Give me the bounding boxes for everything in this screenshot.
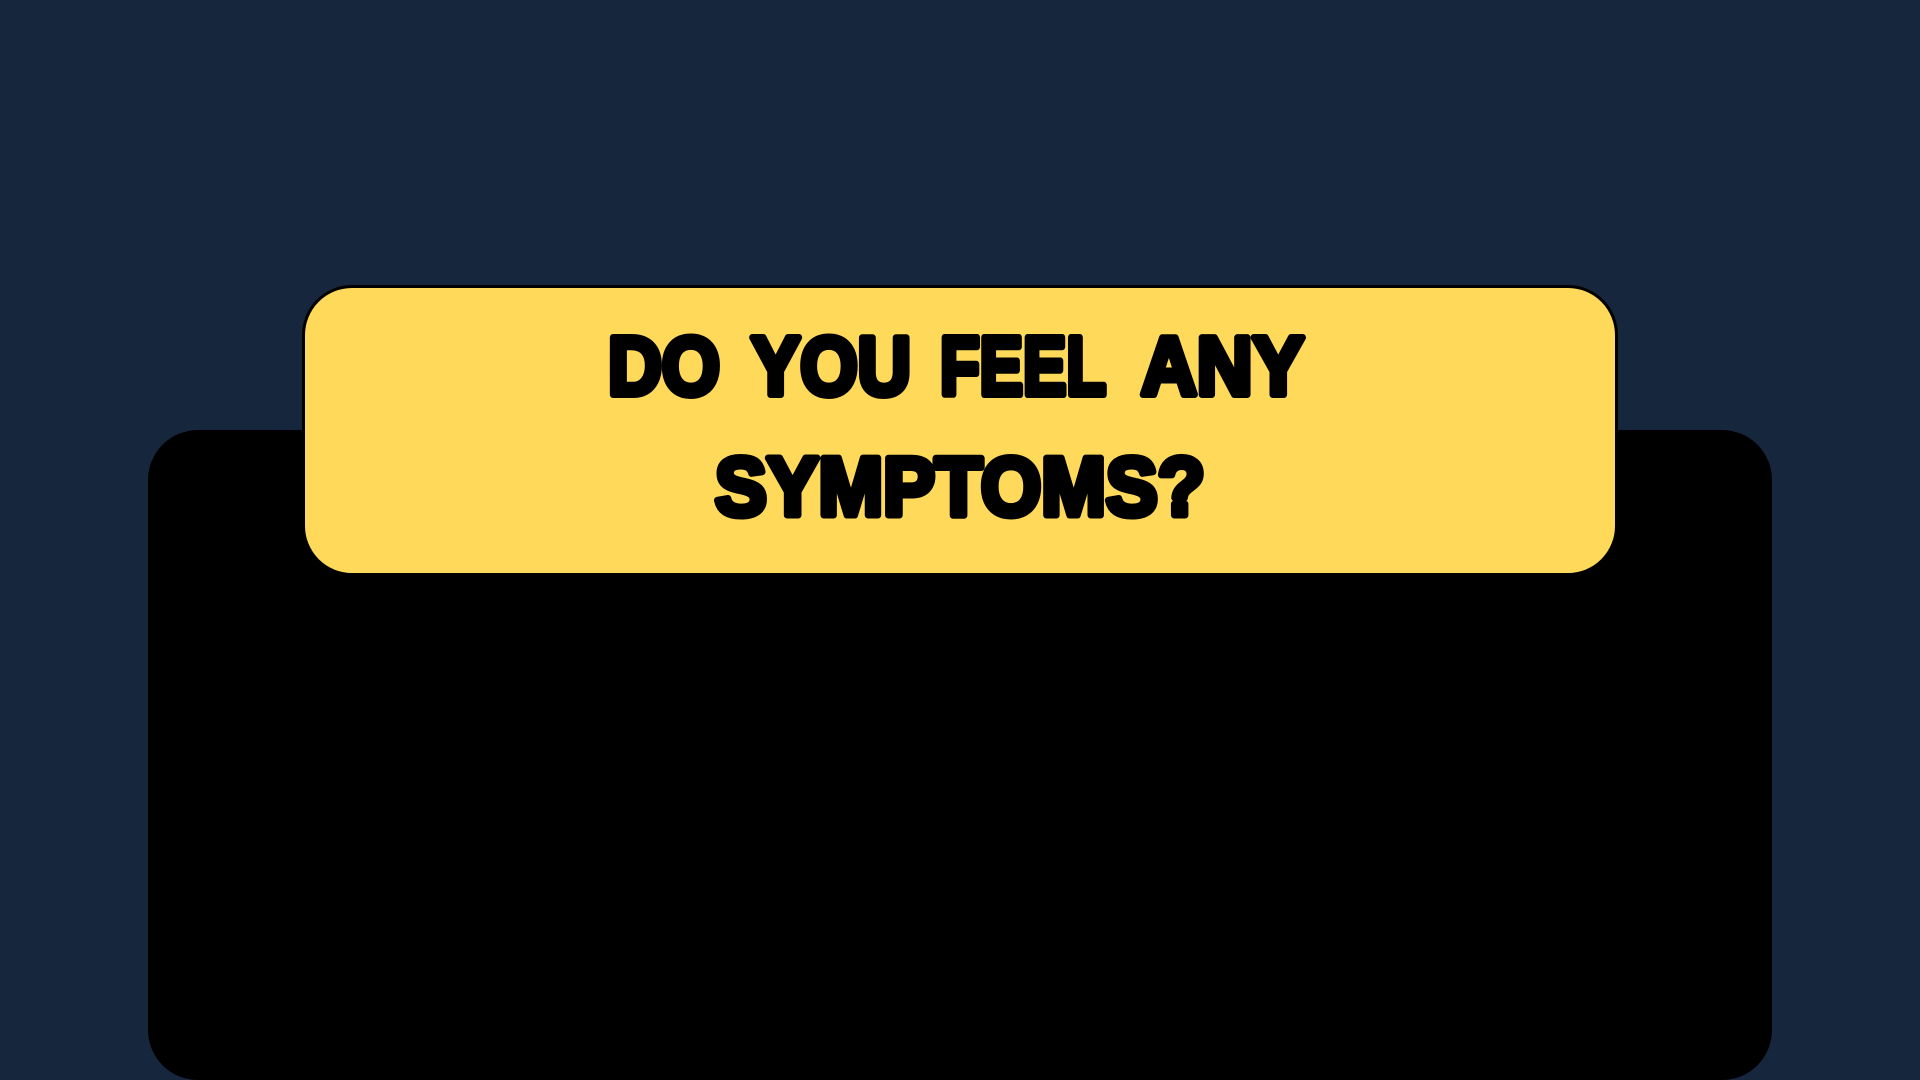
title: question heading: DO <box>608 320 720 412</box>
title: question heading: YOU <box>751 320 911 412</box>
title: question heading: SYMPTOMS? <box>715 440 1205 533</box>
panel: black content card <box>148 430 1772 1080</box>
title: question heading: FEEL <box>940 320 1106 412</box>
banner: yellow question card <box>302 285 1618 576</box>
title: question heading: ANY <box>1141 320 1304 412</box>
